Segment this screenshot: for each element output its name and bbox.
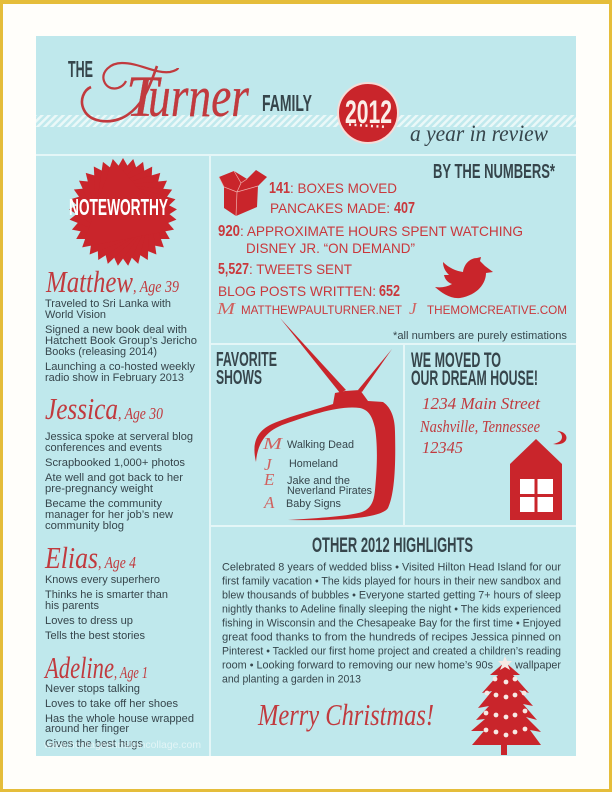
Adeline: Never stops talking (45, 683, 140, 695)
title: The Turner Family: FAMILY (262, 90, 312, 116)
heading (216, 349, 277, 389)
Matthew: Traveled to Sri Lanka with (45, 298, 171, 310)
icon: moon (553, 431, 567, 444)
Jessica: Ate well and got back to her (45, 472, 183, 484)
Jessica: conferences and events (45, 442, 162, 454)
Jessica: , Age 30 (118, 404, 163, 423)
noteworthy label: NOTEWORTHY (69, 194, 168, 220)
icon: starburst (69, 141, 194, 274)
stat: blog posts: 652 (379, 283, 400, 300)
Matthew: Launching a co-hosted weekly (45, 361, 196, 373)
websites: M (216, 299, 236, 318)
stat: hours watching: DISNEY JR. “ON DEMAND” (246, 240, 415, 256)
Adeline: Gives the best hugs (45, 738, 143, 750)
show list: Baby Signs (286, 498, 341, 510)
stat: tweets: 5,527 (218, 261, 249, 278)
Elias: Elias (44, 540, 98, 575)
merry christmas: Merry Christmas! (257, 697, 434, 732)
paragraph: and planting a garden in 2013 (222, 674, 361, 686)
Matthew: Matthew (45, 264, 133, 299)
heading (411, 349, 538, 390)
stat: boxes moved: : BOXES MOVED (290, 180, 397, 196)
address: 12345 (422, 438, 463, 457)
show list: M (262, 434, 283, 453)
icon: television (254, 318, 395, 520)
header stripe band (36, 115, 576, 127)
websites: MATTHEWPAULTURNER.NET (241, 303, 403, 317)
Matthew: Signed a new book deal with (45, 324, 187, 336)
paragraph: wallpaper (514, 660, 561, 672)
paragraph: first family vacation • The kids played for hours in their new sandbox and (222, 576, 561, 588)
Elias: Knows every superhero (45, 574, 160, 586)
Elias: his parents (45, 600, 99, 612)
stat: hours watching: 920 (218, 223, 240, 240)
stat: hours watching (218, 223, 523, 256)
stat: pancakes: PANCAKES MADE: (270, 200, 390, 216)
stat: blog posts: BLOG POSTS WRITTEN: (218, 283, 376, 299)
Adeline: Loves to take off her shoes (45, 698, 178, 710)
Jessica: manager for her job’s new (45, 509, 173, 521)
paragraph: Celebrated 8 years of wedded bliss • Visited Hilton Head Island for our (222, 562, 561, 574)
Jessica: pre-pregnancy weight (45, 483, 153, 495)
Adeline (44, 650, 194, 750)
Adeline: , Age 1 (114, 663, 148, 682)
paragraph: room • Looking forward to removing our new home’s 90s (222, 660, 493, 672)
paragraph: great food thanks to from the hundreds of recipes Jessica pinned on (222, 632, 561, 644)
icon: christmas tree (471, 656, 541, 755)
badge: 2012: 2012 (345, 94, 392, 130)
paragraph: blew thousands of bubbles • Everyone started getting 7+ hours of sleep (222, 590, 561, 602)
title: The Turner Family: urner (148, 64, 249, 129)
Elias: Tells the best stories (45, 630, 146, 642)
panel: noteworthy (44, 141, 197, 750)
show list: Walking Dead (287, 439, 354, 451)
show list: J (264, 455, 273, 474)
show list: Neverland Pirates (287, 485, 372, 497)
watermark: www.heritagechristiancollage.com (43, 740, 201, 751)
Matthew: , Age 39 (133, 277, 179, 296)
show list: E (263, 470, 275, 489)
stat: pancakes: 407 (394, 200, 415, 217)
panel: by the numbers (216, 161, 567, 342)
paragraph: Pinterest • Tackled our first home project and created a children’s reading (222, 646, 561, 658)
show list: Homeland (289, 458, 338, 470)
show list: Jake and the (287, 475, 350, 487)
badge: 2012 (338, 83, 398, 143)
address (419, 394, 541, 457)
icon: house (510, 439, 562, 520)
Adeline: Has the whole house wrapped (45, 713, 194, 725)
stat: boxes moved: 141 (269, 180, 290, 197)
heading: SHOWS (216, 367, 262, 389)
Elias: Loves to dress up (45, 615, 133, 627)
title: The Turner Family: T (126, 64, 162, 129)
panel dividers (36, 154, 576, 756)
Elias: , Age 4 (98, 553, 136, 572)
websites: THEMOMCREATIVE.COM (427, 303, 567, 317)
Matthew: radio show in February 2013 (45, 372, 184, 384)
paragraph: nightly thanks to Adeline finally sleeping the night • The kids experienced (222, 604, 561, 616)
Elias (44, 540, 168, 642)
Jessica: Jessica spoke at serveral blog (45, 431, 193, 443)
Jessica: Jessica (45, 391, 118, 426)
paragraph: fishing in Wisconsin and the Chesapeake Bay for the first time • Enjoyed (222, 618, 561, 630)
heading: WE MOVED TO (411, 349, 501, 372)
address: Nashville, Tennessee (419, 417, 540, 436)
subtitle: a year in review: a year in review (410, 121, 549, 146)
panel: dream house (411, 349, 567, 520)
Jessica (45, 391, 193, 532)
icon: box (219, 170, 267, 216)
websites: J (409, 299, 418, 318)
footnote: *all numbers are purely estimations (393, 330, 567, 342)
title: The Turner Family (68, 56, 312, 129)
icon: twitter bird (435, 257, 493, 298)
show list: A (263, 493, 275, 512)
Matthew: World Vision (45, 309, 106, 321)
Adeline: around her finger (45, 723, 129, 735)
Jessica: Scrapbooked 1,000+ photos (45, 457, 185, 469)
show list (262, 434, 372, 512)
paragraph (222, 562, 561, 686)
address: 1234 Main Street (422, 394, 541, 413)
title: The Turner Family: THE (68, 56, 93, 82)
stat: hours watching: : APPROXIMATE HOURS SPENT WATCHING (240, 223, 523, 239)
panel: other highlights (222, 533, 561, 755)
Jessica: Became the community (45, 498, 163, 510)
websites (216, 299, 567, 318)
Jessica: community blog (45, 520, 124, 532)
Matthew: Hatchett Book Group’s Jericho (45, 335, 197, 347)
Elias: Thinks he is smarter than (45, 589, 168, 601)
heading: OTHER 2012 HIGHLIGHTS (312, 533, 473, 557)
Matthew (45, 264, 197, 384)
heading: FAVORITE (216, 349, 277, 371)
Matthew: Books (releasing 2014) (45, 346, 157, 358)
stat: tweets: : TWEETS SENT (249, 261, 352, 277)
Adeline: Adeline (44, 650, 114, 685)
panel: favorite shows (216, 318, 395, 520)
